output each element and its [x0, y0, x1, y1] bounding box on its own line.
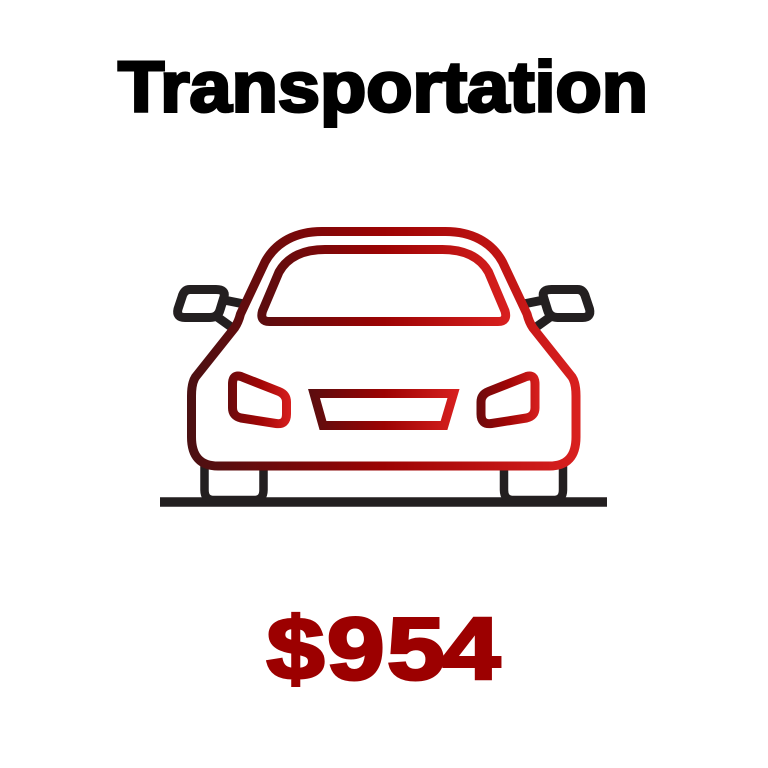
left mirror	[178, 290, 244, 329]
grille	[314, 394, 454, 426]
car body	[192, 232, 576, 466]
icon: car	[160, 232, 607, 502]
right headlight	[481, 376, 535, 424]
windshield	[262, 250, 506, 322]
title: Transportation	[118, 48, 648, 128]
left headlight	[232, 376, 286, 424]
right mirror	[524, 290, 590, 329]
price: $954	[267, 600, 500, 698]
road	[160, 497, 607, 507]
right wheel	[504, 466, 563, 500]
left wheel	[204, 466, 264, 500]
